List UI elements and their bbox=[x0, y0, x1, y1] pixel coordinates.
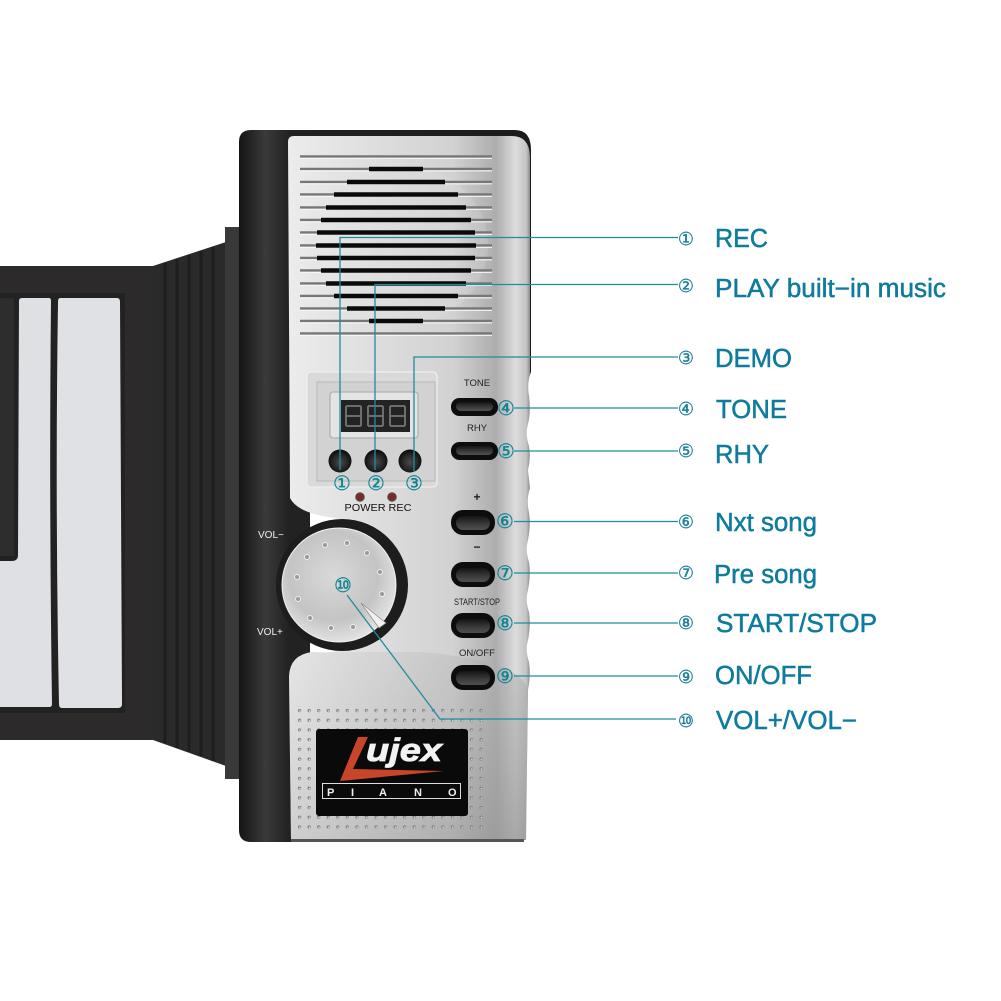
function labels: REC bbox=[715, 225, 768, 253]
TONE button bbox=[451, 398, 498, 416]
Lujex piano logo: O bbox=[448, 787, 457, 799]
function labels bbox=[714, 225, 946, 735]
Lujex piano logo: I bbox=[351, 787, 354, 799]
on-device circled numbers: ① bbox=[333, 471, 351, 495]
display recess bbox=[307, 372, 437, 487]
Lujex piano logo: P bbox=[327, 787, 334, 799]
speaker grille bbox=[300, 156, 492, 335]
right circled numbers: ⑥ bbox=[678, 512, 694, 533]
on-device circled numbers: ② bbox=[367, 471, 385, 495]
start stop button bbox=[451, 613, 495, 638]
white key left bbox=[0, 298, 52, 707]
right circled numbers: ⑩ bbox=[678, 711, 694, 732]
volume knob bbox=[276, 519, 408, 651]
white key right bbox=[57, 298, 122, 708]
function labels: VOL+/VOL− bbox=[716, 707, 857, 735]
DEMO button bbox=[398, 450, 422, 472]
RHY button bbox=[451, 442, 498, 460]
function labels: START/STOP bbox=[716, 610, 877, 638]
on-device circled numbers: ⑨ bbox=[496, 664, 514, 688]
bottom edge shadow bbox=[291, 839, 524, 842]
black key bbox=[0, 298, 14, 556]
dotted texture bbox=[297, 708, 488, 833]
right circled numbers: ④ bbox=[678, 399, 694, 420]
next song button bbox=[451, 510, 495, 535]
on-device circled numbers: ⑥ bbox=[496, 509, 514, 533]
function labels: RHY bbox=[715, 441, 769, 469]
right circled numbers bbox=[678, 229, 694, 732]
silver control panel bbox=[288, 136, 530, 840]
on off button bbox=[451, 665, 495, 690]
on-device circled numbers bbox=[333, 396, 515, 688]
right circled numbers: ⑤ bbox=[678, 441, 694, 462]
LED digits bbox=[345, 405, 406, 427]
VOL plus label: VOL+ bbox=[257, 627, 283, 638]
on-device circled numbers: ⑤ bbox=[497, 439, 515, 463]
START/STOP label: START/STOP bbox=[454, 597, 500, 608]
roll-up keyboard mat bbox=[0, 266, 154, 740]
function labels: PLAY built−in music bbox=[715, 275, 946, 303]
right circled numbers: ③ bbox=[678, 348, 694, 369]
plus label: + bbox=[473, 490, 481, 504]
ON/OFF label: ON/OFF bbox=[459, 648, 495, 659]
POWER REC label: POWER REC bbox=[344, 502, 412, 514]
side bracket bbox=[225, 227, 241, 779]
rec LED bbox=[388, 493, 396, 501]
device body bbox=[239, 130, 531, 842]
minus label: − bbox=[473, 540, 481, 554]
function labels: TONE bbox=[716, 396, 787, 424]
display module bbox=[317, 382, 435, 481]
teal callout lines bbox=[340, 238, 678, 719]
Lujex piano logo bbox=[316, 729, 468, 816]
right circled numbers: ① bbox=[678, 229, 694, 250]
on-device circled numbers: ⑦ bbox=[496, 561, 514, 585]
previous song button bbox=[451, 562, 495, 587]
PLAY button bbox=[364, 450, 388, 472]
on-device circled numbers: ⑧ bbox=[496, 611, 514, 635]
VOL minus label: VOL− bbox=[258, 530, 284, 541]
function labels: Nxt song bbox=[715, 509, 817, 537]
on-device circled numbers: ⑩ bbox=[334, 573, 352, 597]
ribbed hinge bbox=[153, 242, 226, 766]
Lujex piano logo: ujex bbox=[366, 732, 443, 768]
right circled numbers: ⑦ bbox=[678, 563, 694, 584]
right circled numbers: ② bbox=[678, 276, 694, 297]
on-device circled numbers: ③ bbox=[405, 471, 423, 495]
function labels: DEMO bbox=[715, 345, 792, 373]
function labels: ON/OFF bbox=[715, 662, 812, 690]
right circled numbers: ⑧ bbox=[678, 613, 694, 634]
on-device circled numbers: ④ bbox=[497, 396, 515, 420]
power LED bbox=[356, 493, 364, 501]
REC button bbox=[328, 450, 352, 472]
function labels: Pre song bbox=[714, 561, 817, 589]
TONE label: TONE bbox=[464, 378, 490, 389]
Lujex piano logo: N bbox=[414, 787, 422, 799]
RHY label: RHY bbox=[467, 423, 488, 434]
right circled numbers: ⑨ bbox=[678, 667, 694, 688]
Lujex piano logo: A bbox=[379, 787, 387, 799]
